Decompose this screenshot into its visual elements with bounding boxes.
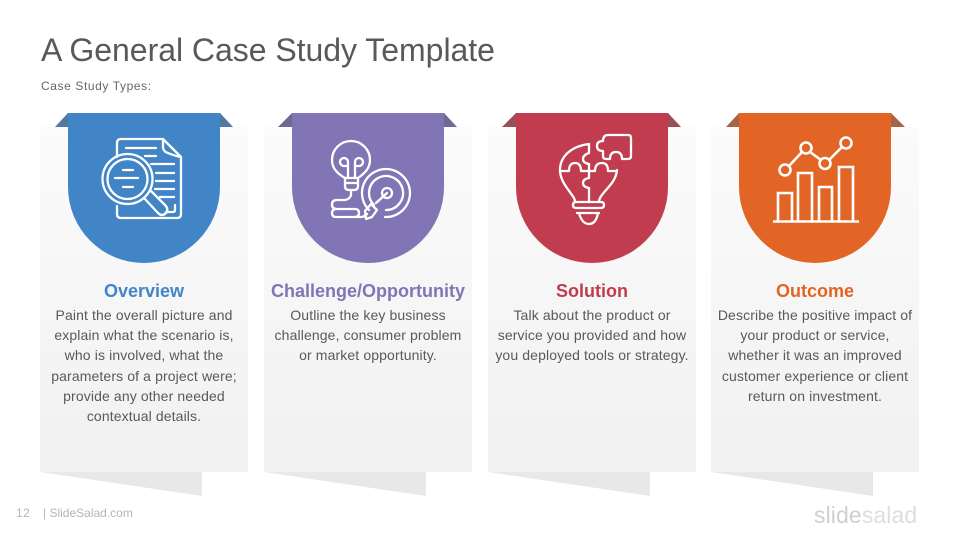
subtitle: Case Study Types: xyxy=(41,79,152,93)
panel: overview xyxy=(40,113,248,496)
text: overview: contextual details. xyxy=(87,408,201,424)
panel: outcome xyxy=(711,113,919,496)
icon: bar chart with trend line xyxy=(773,138,859,222)
panel: challenge/opportunity xyxy=(264,113,472,496)
text: outcome: return on investment. xyxy=(748,388,882,404)
text: overview: who is involved, what the xyxy=(65,347,223,363)
text: solution: Talk about the product or xyxy=(513,307,671,323)
panel: solution xyxy=(488,113,696,496)
logo: slidesalad xyxy=(814,502,917,528)
text: outcome: Describe the positive impact of xyxy=(718,307,912,323)
heading: overview: Overview xyxy=(104,281,184,301)
text: outcome: whether it was an improved xyxy=(728,347,902,363)
heading: challenge/opportunity: Challenge/Opportunity xyxy=(271,281,465,301)
text: overview: Paint the overall picture and xyxy=(55,307,233,323)
icon: puzzle bulb xyxy=(560,135,631,224)
text: outcome: your product or service, xyxy=(740,327,890,343)
text: solution xyxy=(495,307,689,363)
text: challenge/opportunity xyxy=(275,307,461,363)
icon: document and magnifier xyxy=(102,139,181,218)
text: overview xyxy=(51,307,237,424)
text: outcome: customer experience or client xyxy=(722,368,908,384)
footer site name: | SlideSalad.com xyxy=(43,506,133,520)
text: challenge/opportunity: Outline the key business xyxy=(290,307,446,323)
text: solution: service you provided and how xyxy=(498,327,686,343)
text: outcome xyxy=(718,307,912,404)
text: challenge/opportunity: challenge, consumer problem xyxy=(275,327,461,343)
text: overview: parameters of a project were; xyxy=(51,368,237,384)
heading: solution: Solution xyxy=(556,281,628,301)
text: overview: explain what the scenario is, xyxy=(54,327,234,343)
title: A General Case Study Template xyxy=(41,32,495,68)
text: challenge/opportunity: or market opportunity. xyxy=(299,347,437,363)
text: overview: provide any other needed xyxy=(63,388,225,404)
icon: bulb and target xyxy=(332,141,410,219)
heading: outcome: Outcome xyxy=(776,281,854,301)
page number: 12 xyxy=(16,506,30,520)
text: solution: you deployed tools or strategy. xyxy=(495,347,689,363)
